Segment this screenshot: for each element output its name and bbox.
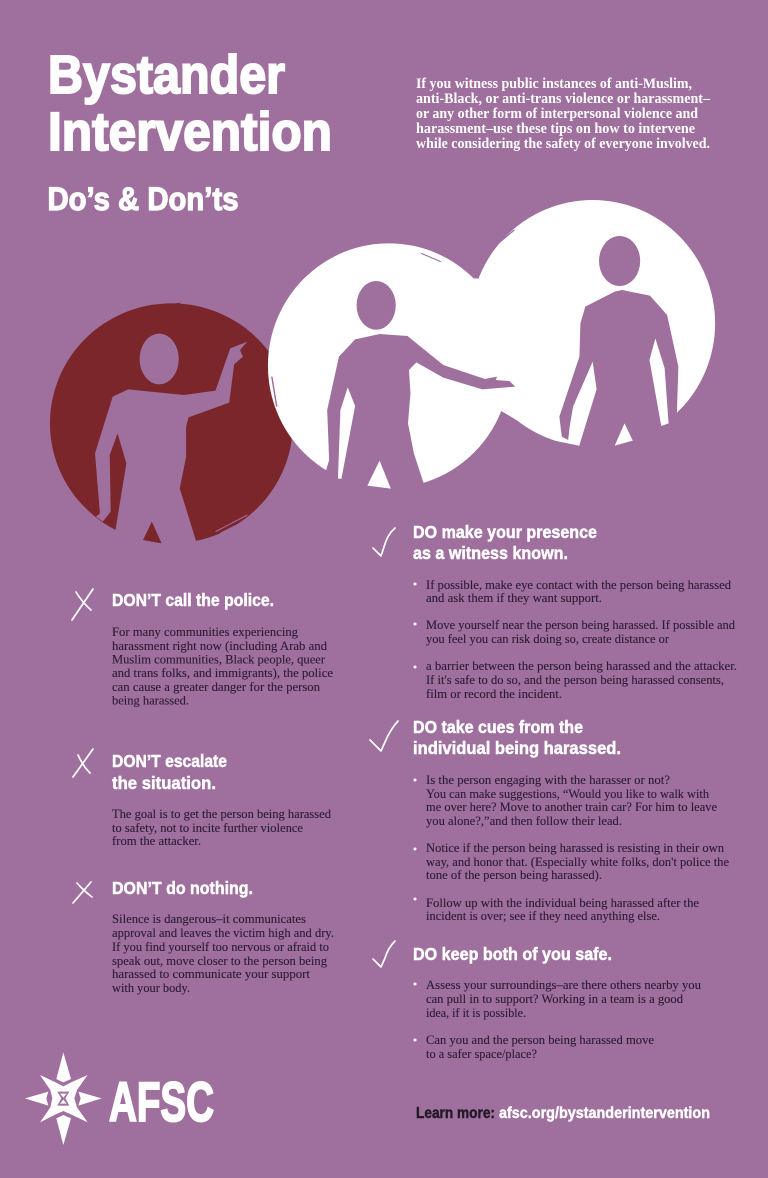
body text: can cause a greater danger for the person [112,680,321,694]
bullet list: Assess your surroundings–are there others nearby you [426,978,702,992]
body text: Muslim communities, Black people, queer [112,652,326,666]
bullet list: a barrier between the person being harassed and the attacker. [426,659,737,673]
title [48,45,332,162]
icon: check mark [373,528,395,556]
heading: individual being harassed. [413,738,621,758]
heading: DON’T do nothing. [112,878,253,898]
body text: with your body. [112,981,190,995]
body text: harassment right now (including Arab and [112,639,328,653]
intro text block: or any other form of interpersonal violence and [416,106,698,122]
body text: to safety, not to incite further violence [112,821,303,835]
body text [112,912,334,995]
bullet list: Is the person engaging with the harasser or not? [426,773,670,787]
heading: DON’T call the police. [112,590,274,610]
illustration: three figures in circles [50,200,715,563]
bullet list: tone of the person being harassed). [426,868,602,882]
subtitle: Do’s & Don’ts [48,181,238,217]
bullet list: Can you and the person being harassed move [426,1033,654,1047]
bullet list: If possible, make eye contact with the person being harassed [426,578,732,592]
heading: DO keep both of you safe. [413,944,612,964]
logo: AFSC star and wordmark [25,1052,214,1145]
learn more link: Learn more: [416,1105,495,1122]
bullet list: and ask them if they want support. [426,591,602,605]
bullet list: can pull in to support? Working in a team is a good [426,992,684,1006]
body text: and trans folks, and immigrants), the police [112,666,333,680]
wordmark: AFSC [109,1070,214,1133]
body text: The goal is to get the person being harassed [112,807,332,821]
heading: DON’T escalate [112,751,227,771]
bullet list [414,773,729,923]
body text: being harassed. [112,694,189,708]
body text: If you find yourself too nervous or afraid to [112,940,329,954]
bullet list: incident is over; see if they need anything else. [426,909,660,923]
icon: check mark [370,721,398,751]
icon: AFSC star [25,1052,102,1145]
panel: do keep both safe [373,941,702,1061]
panel: don't escalate [73,749,332,848]
bullet list: you alone?,”and then follow their lead. [426,814,622,828]
heading [413,522,597,563]
bullet list: film or record the incident. [426,687,562,701]
bullet list: You can make suggestions, “Would you like to walk with [426,787,710,801]
title: Intervention [48,102,332,162]
body text: Silence is dangerous–it communicates [112,912,306,926]
icon: check mark [373,941,395,967]
body text [112,807,332,848]
heading: as a witness known. [413,543,568,563]
learn more link [416,1105,710,1122]
body text: For many communities experiencing [112,625,299,639]
heading: DO make your presence [413,522,597,542]
bullet list: me over here? Move to another train car? For him to leave [426,800,717,814]
heading [413,717,621,758]
heading [112,751,227,793]
heading: DO take cues from the [413,717,583,737]
body text [112,625,333,708]
bullet list: idea, if it is possible. [426,1006,526,1020]
white circle with right figure [470,200,715,467]
bullet list: to a safer space/place? [426,1047,537,1061]
title: Bystander [48,45,285,105]
intro text block: harassment–use these tips on how to intervene [416,121,696,137]
white circle with central bystander figure [268,243,515,517]
panel: don't call the police [72,589,333,708]
red circle with aggressor figure [50,303,293,563]
panel: do make your presence known [373,522,737,701]
body text: harassed to communicate your support [112,967,310,981]
bullet list [414,578,737,701]
intro text block: while considering the safety of everyone involved. [416,136,710,152]
bullet list: Follow up with the individual being harassed after the [426,896,699,910]
bullet list [414,978,702,1061]
icon: x mark [73,749,93,777]
intro text block: If you witness public instances of anti-Muslim, [416,76,692,92]
intro text block [416,76,711,152]
icon: x mark [72,589,93,620]
learn more link: afsc.org/bystanderintervention [499,1105,710,1122]
body text: from the attacker. [112,834,201,848]
panel: don't do nothing [73,878,334,995]
bullet list: you feel you can risk doing so, create distance or [426,632,670,646]
icon: x mark [73,882,92,903]
bullet list: Notice if the person being harassed is resisting in their own [426,841,725,855]
bullet list: Move yourself near the person being harassed. If possible and [426,618,736,632]
body text: speak out, move closer to the person being [112,954,328,968]
bullet list: If it's safe to do so, and the person being harassed consents, [426,673,724,687]
body text: approval and leaves the victim high and dry. [112,926,334,940]
bullet list: way, and honor that. (Especially white folks, don't police the [426,855,729,869]
panel: do take cues [370,717,729,923]
intro text block: anti-Black, or anti-trans violence or harassment– [416,91,711,107]
heading: the situation. [112,773,216,793]
